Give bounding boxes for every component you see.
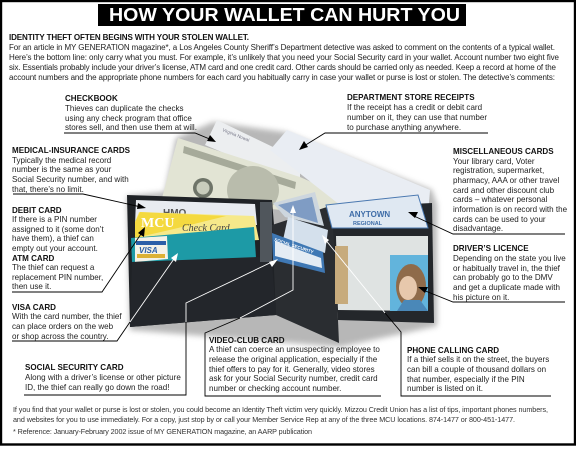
driver's licence callout: Depending on the state you live <box>453 254 566 263</box>
footer note: * Reference: January-February 2002 issue of MY GENERATION magazine, an AARP publication <box>13 427 312 436</box>
miscellaneous cards callout: card and other discount club <box>453 186 555 195</box>
intro text: Here’s the bottom line: only carry what you must. For example, it’s unlikely that you need your Social Security card in your wallet. Account number two eight five <box>9 53 560 62</box>
library card: ANYTOWN <box>349 210 390 219</box>
video-club card callout: A thief can coerce an unsuspecting employee to <box>209 345 380 354</box>
phone calling card callout: PHONE CALLING CARD <box>407 346 499 355</box>
video-club card callout: ask for your Social Security number, credit card <box>209 374 378 383</box>
library card: REGIONAL <box>353 221 383 227</box>
library card <box>326 195 428 228</box>
debit card: Check Card <box>182 223 231 234</box>
debit and atm card callout: ATM CARD <box>12 254 55 263</box>
medical-insurance cards callout: number is the same as your <box>12 165 112 174</box>
visa card callout: With the card number, the thief <box>12 312 122 321</box>
miscellaneous cards callout: MISCELLANEOUS CARDS <box>453 147 554 156</box>
medical-insurance cards callout: Typically the medical record <box>12 156 111 165</box>
miscellaneous cards callout: disadvantage. <box>453 224 503 233</box>
debit and atm card callout: empty out your account. <box>12 244 98 253</box>
debit card: MCU <box>141 216 174 231</box>
driver's licence callout: or habitually travel in, the thief <box>453 264 561 273</box>
debit and atm card callout: replacement PIN number, <box>12 273 103 282</box>
medical-insurance cards callout: Social Security number, and with <box>12 175 129 184</box>
visa card callout: VISA CARD <box>12 303 56 312</box>
debit card <box>135 212 259 245</box>
social security card: SOCIAL SECURITY <box>274 237 314 255</box>
checkbook callout: CHECKBOOK <box>65 94 118 103</box>
phone calling card callout: number is listed on it. <box>407 384 483 393</box>
debit and atm card callout: have them), a thief can <box>12 234 94 243</box>
driver's licence <box>335 236 428 311</box>
wallet photograph: HMO <box>163 208 187 219</box>
visa card callout <box>12 253 178 341</box>
phone calling card callout: If a thief sells it on the street, the buyers <box>407 355 549 364</box>
department store receipts callout: If the receipt has a credit or debit card <box>347 103 482 112</box>
medical-insurance cards callout <box>12 146 146 209</box>
visa card callout: or shop across the country. <box>12 332 108 341</box>
debit and atm card callout <box>12 206 145 292</box>
video-club card callout: release the original application, especially if the <box>209 355 378 364</box>
debit and atm card callout: DEBIT CARD <box>12 206 62 215</box>
visa card callout: can place orders on the web <box>12 322 114 331</box>
title: HOW YOUR WALLET CAN HURT YOU <box>109 4 460 25</box>
department store receipts callout: number on it, they can use that number <box>347 113 487 122</box>
checkbook callout: Thieves can duplicate the checks <box>65 104 184 113</box>
debit and atm card callout: then use it. <box>12 282 51 291</box>
check <box>205 120 300 185</box>
video-club card callout: number or checking account number. <box>209 384 341 393</box>
video-club card callout: thief offers to pay for it. Generally, video stores <box>209 365 375 374</box>
checkbook callout <box>64 94 216 142</box>
left pocket <box>130 257 276 327</box>
phone calling card callout: that number, especially if the PIN <box>407 375 525 384</box>
receipt <box>270 130 430 228</box>
miscellaneous cards callout: cards can be used to your <box>453 215 546 224</box>
debit and atm card callout: The thief can request a <box>12 263 95 272</box>
footer note: and websites for you to use immediately. For a copy, just stop by or call your Member Service Rep at any of the three MCU locations. 874-1477 or 800-451-1477. <box>13 415 515 424</box>
miscellaneous cards callout: registration, supermarket, <box>453 166 544 175</box>
social security card callout: ID, the thief can really go down the road! <box>25 383 169 392</box>
wallet spine stripe <box>260 202 272 262</box>
left wallet panel <box>127 195 280 327</box>
driver's licence callout: and get a duplicate made with <box>453 283 560 292</box>
department store receipts callout: to purchase anything anywhere. <box>347 123 461 132</box>
plastic sleeve card <box>273 192 324 226</box>
driver's licence callout: can probably go to the DMV <box>453 273 553 282</box>
department store receipts callout: DEPARTMENT STORE RECEIPTS <box>347 93 475 102</box>
phone calling card callout <box>322 235 551 396</box>
visa card: VISA <box>139 246 158 255</box>
medical card <box>135 200 257 225</box>
ten dollar bill <box>162 138 345 215</box>
driver's licence callout <box>418 244 566 302</box>
social security card callout: SOCIAL SECURITY CARD <box>25 363 124 372</box>
driver's licence callout: DRIVER’S LICENCE <box>453 244 529 253</box>
miscellaneous cards callout: Your library card, Voter <box>453 157 535 166</box>
intro text: IDENTITY THEFT OFTEN BEGINS WITH YOUR STOLEN WALLET. <box>9 33 249 42</box>
social security card <box>272 233 325 273</box>
miscellaneous cards callout <box>408 147 568 234</box>
debit and atm card callout: If there is a PIN number <box>12 215 97 224</box>
miscellaneous cards callout: information is on record with the <box>453 205 568 214</box>
intro text <box>9 33 560 82</box>
footer note: If you find that your wallet or purse is lost or stolen, you could become an Identity Theft victim very quickly. Mizzou Credit Union has a list of tips, important phones numbers, <box>13 405 548 414</box>
miscellaneous cards callout: pharmacy, AAA or other travel <box>453 176 560 185</box>
department store receipts callout <box>299 93 488 150</box>
debit and atm card callout: assigned to it (some don’t <box>12 225 104 234</box>
footer note <box>13 405 548 436</box>
driver's licence callout: his picture on it. <box>453 293 509 302</box>
right wallet panel <box>332 203 434 323</box>
video-club card callout: VIDEO-CLUB CARD <box>209 336 285 345</box>
checkbook callout: using any check program that office <box>65 114 192 123</box>
checkbook callout: stores sell, and then use them at will. <box>65 123 197 132</box>
visa card <box>131 227 256 262</box>
medical-insurance cards callout: MEDICAL-INSURANCE CARDS <box>12 146 131 155</box>
phone calling card callout: can bill a couple of thousand dollars on <box>407 365 546 374</box>
intro text: For an article in MY GENERATION magazine*, a Los Angeles County Sheriff’s Department detective was asked to comment on the contents of a typical wallet. <box>9 43 555 52</box>
wallet photograph: Virginia Nowal <box>222 127 250 143</box>
wallet photograph <box>127 120 437 347</box>
center flap <box>272 205 339 343</box>
soft shadow <box>127 122 437 347</box>
social security card callout: Along with a driver’s license or other picture <box>25 373 181 382</box>
video-club card callout <box>205 205 381 396</box>
medical-insurance cards callout: that, there’s no limit. <box>12 185 84 194</box>
phone card <box>283 217 328 253</box>
intro text: account numbers and the appropriate phone numbers for each card you habitually carry in case your wallet or purse is lost or stolen. The detective’s comments: <box>9 73 555 82</box>
miscellaneous cards callout: cards – whatever personal <box>453 195 548 204</box>
social security card callout <box>24 259 278 395</box>
intro text: six. Essentials probably include your driver’s license, ATM card and one credit card. Other cards should be carried only as needed. Keep a record at home of the <box>9 63 557 72</box>
